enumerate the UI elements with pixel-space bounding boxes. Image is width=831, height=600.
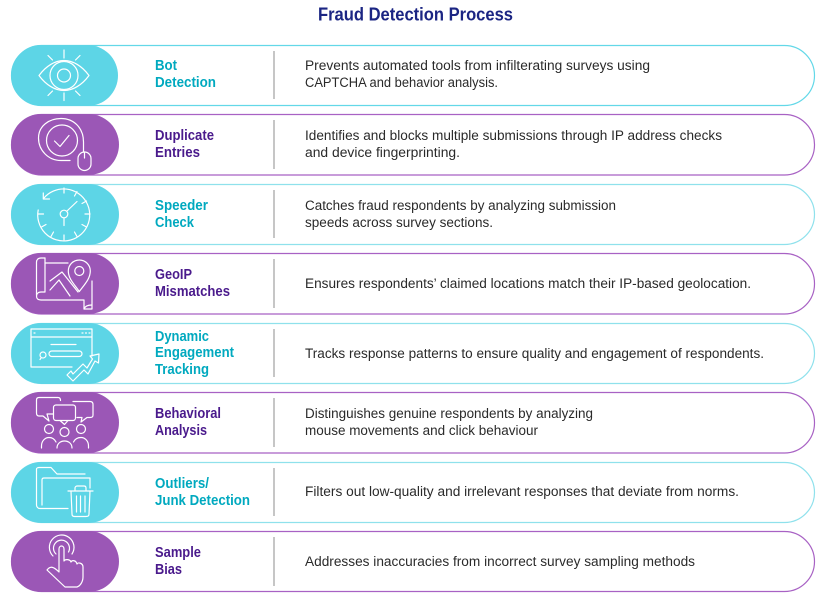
description: mouse movements and click behaviour <box>305 423 538 438</box>
divider <box>273 259 275 308</box>
pill <box>11 184 119 245</box>
divider <box>273 537 275 586</box>
description: Catches fraud respondents by analyzing submission <box>305 198 616 213</box>
row outline <box>12 392 814 453</box>
label: Check <box>155 215 195 231</box>
title: Fraud Detection Process <box>318 4 513 24</box>
label: Speeder <box>155 198 208 214</box>
row outline <box>12 462 814 522</box>
label: Sample <box>155 545 201 561</box>
row outline <box>12 254 814 314</box>
row: Behavioral Analysis <box>11 392 814 453</box>
label: Duplicate <box>155 128 214 144</box>
label: Bias <box>155 562 182 578</box>
row outline <box>12 532 814 592</box>
row: Dynamic Engagement Tracking <box>11 323 814 384</box>
label: Bot <box>155 58 177 74</box>
label: Analysis <box>155 423 207 439</box>
row: Duplicate Entries <box>11 114 814 175</box>
icon: eye <box>39 50 89 100</box>
description: Distinguishes genuine respondents by analyzing <box>305 406 593 421</box>
row: Sample Bias <box>11 531 814 592</box>
divider <box>273 51 275 99</box>
icon: map with pin <box>36 258 92 309</box>
label: Mismatches <box>155 284 230 300</box>
description: speeds across survey sections. <box>305 215 493 230</box>
row outline <box>12 184 814 244</box>
description: and device fingerprinting. <box>305 145 460 160</box>
row outline <box>12 114 814 175</box>
pill <box>11 531 119 592</box>
description: Tracks response patterns to ensure quality and engagement of respondents. <box>305 346 764 361</box>
description: Ensures respondents’ claimed locations match their IP-based geolocation. <box>305 276 751 291</box>
pill <box>11 462 119 523</box>
pill <box>11 253 119 314</box>
divider <box>273 120 275 169</box>
divider <box>273 329 275 377</box>
description: Filters out low-quality and irrelevant responses that deviate from norms. <box>305 484 739 499</box>
label: Behavioral <box>155 406 221 422</box>
description: Identifies and blocks multiple submissions through IP address checks <box>305 128 722 143</box>
icon: stopwatch <box>38 188 90 241</box>
label: Dynamic <box>155 329 209 345</box>
description: CAPTCHA and behavior analysis. <box>305 75 498 90</box>
label: GeoIP <box>155 267 192 283</box>
row outline <box>12 324 814 384</box>
label: Entries <box>155 145 200 161</box>
description: Addresses inaccuracies from incorrect survey sampling methods <box>305 554 695 569</box>
row: Outliers / Junk Detection <box>11 462 814 523</box>
label: Detection <box>155 75 216 91</box>
pill <box>11 392 119 453</box>
icon: browser with rising arrow <box>31 329 99 381</box>
icon: tapping finger <box>47 535 83 587</box>
pill <box>11 114 119 175</box>
description: Prevents automated tools from infilterating surveys using <box>305 58 650 73</box>
icon: checked circle with mouse <box>38 118 91 170</box>
row: Bot Detection <box>11 45 814 106</box>
label: Outliers/ <box>155 476 209 492</box>
icon: folder and trash can <box>36 468 93 516</box>
pill <box>11 45 118 106</box>
label: Engagement <box>155 345 234 361</box>
label: Junk Detection <box>155 493 250 509</box>
divider <box>273 190 275 238</box>
label: Tracking <box>155 362 209 378</box>
row: GeoIP Mismatches <box>11 253 814 314</box>
divider <box>273 398 275 447</box>
row: Speeder Check <box>11 184 814 245</box>
pill <box>11 323 119 384</box>
divider <box>273 468 275 516</box>
icon: group with speech bubbles <box>36 398 93 448</box>
row outline <box>12 46 814 106</box>
